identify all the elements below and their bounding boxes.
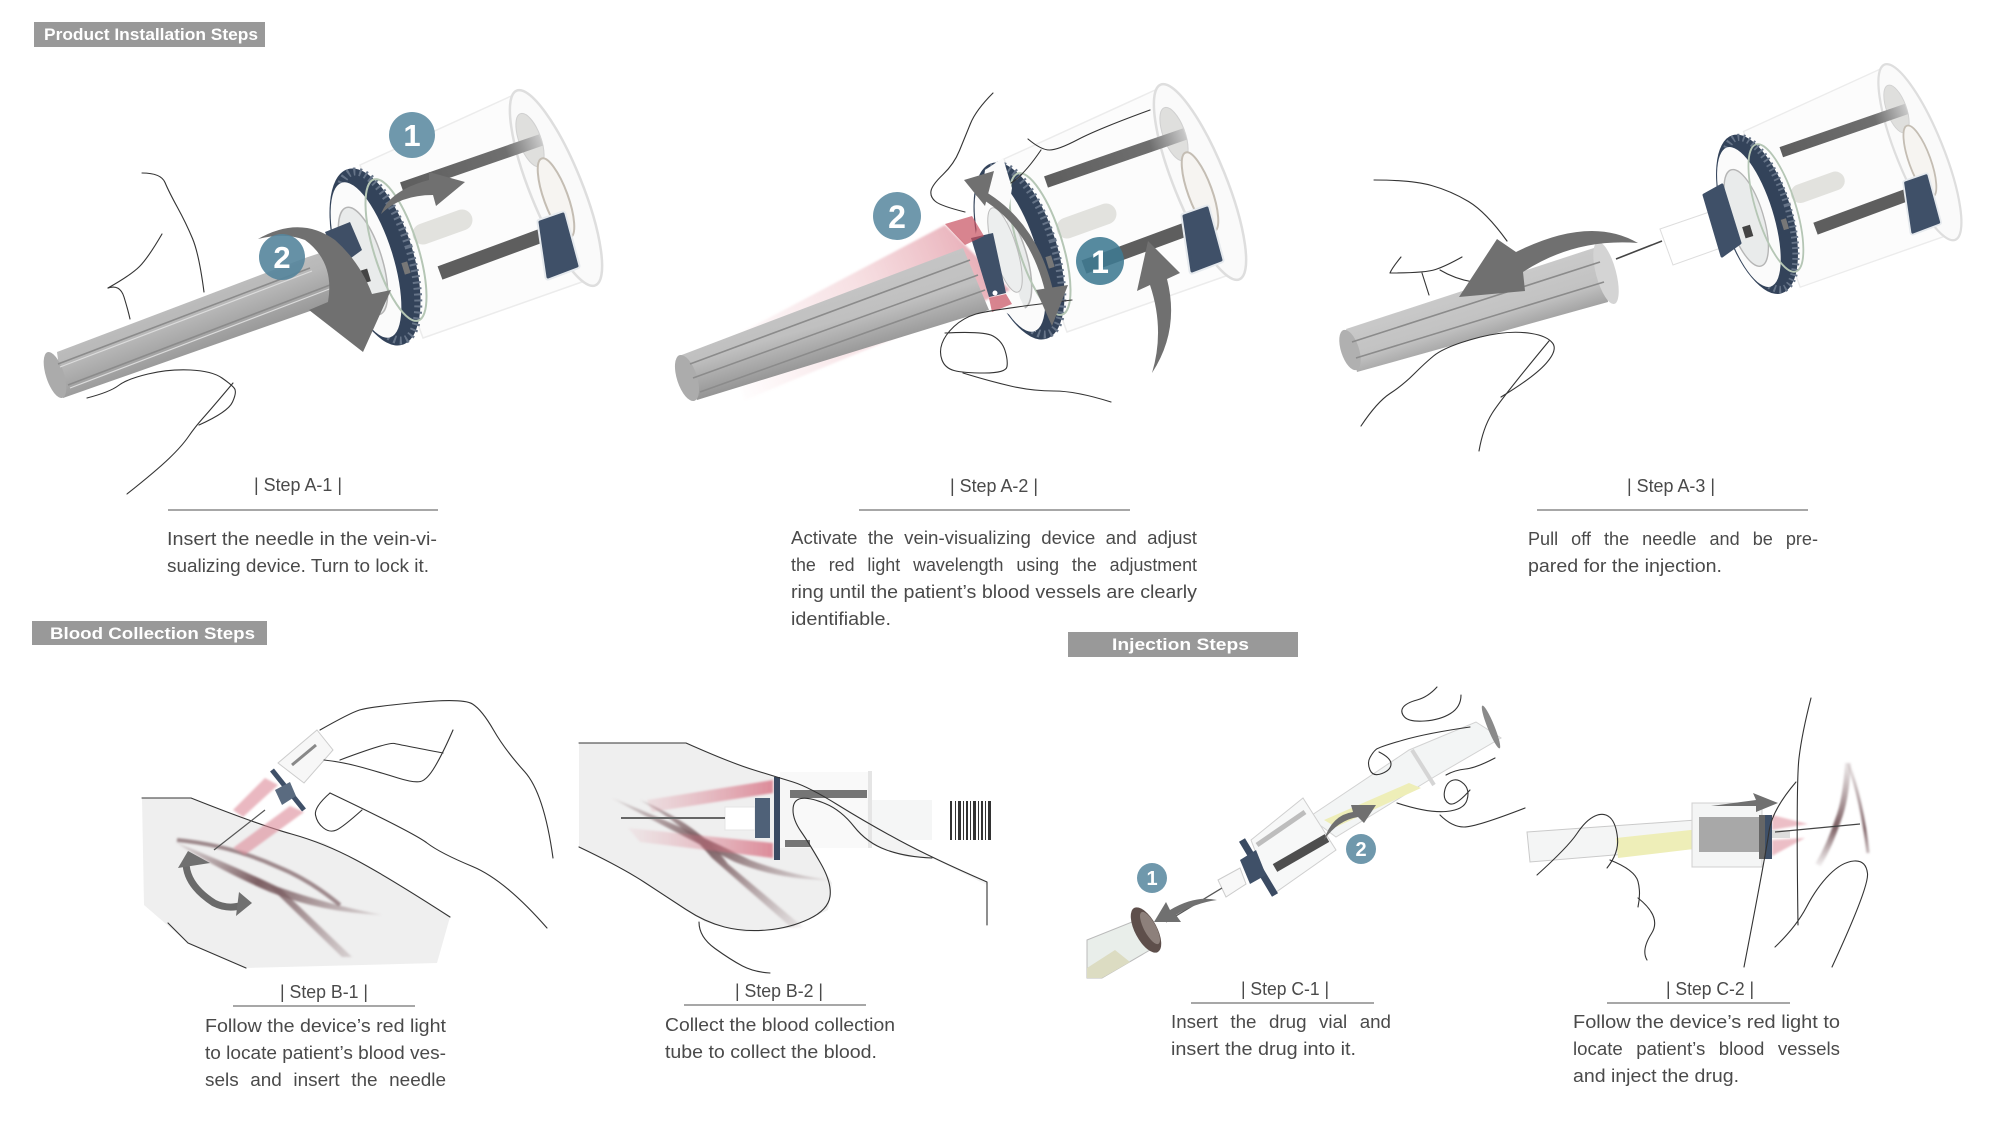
hand lower A-3 <box>1361 332 1554 451</box>
veins B-2 <box>612 798 830 928</box>
badge 2 A-1 <box>259 234 305 280</box>
caption: step B-2: Collect the blood collection <box>665 1015 895 1035</box>
caption: step A-3: Pull off the needle and be pre- <box>1528 529 1818 549</box>
red beams C-2 <box>1772 815 1808 856</box>
arm B-1 <box>142 798 450 968</box>
caption: step C-1: insert the drug into it. <box>1171 1039 1356 1059</box>
caption: step C-1: | Step C-1 | <box>1241 979 1329 999</box>
caption: step B-2: | Step B-2 | <box>735 981 823 1001</box>
syringe barrel C-2 <box>1527 820 1699 862</box>
red beams B-2 <box>628 780 773 858</box>
badge 2 C-1: 2 <box>1355 839 1367 861</box>
device A-1 <box>311 81 619 356</box>
barcode B-2 <box>950 801 991 840</box>
panel: step A-1 illustration <box>39 81 619 494</box>
red beams B-1 <box>233 778 304 855</box>
heading: Blood Collection Steps <box>32 621 267 645</box>
device B-1 <box>214 730 333 850</box>
arm B-2 <box>579 743 832 932</box>
panel: step B-1 illustration <box>142 701 553 968</box>
badge 2 A-2: 2 <box>888 199 906 235</box>
hand lower A-1 <box>87 370 235 494</box>
syringe barrel C-1 <box>1309 722 1501 837</box>
device A-2 <box>955 75 1263 350</box>
plunger flange C-1 <box>1479 704 1503 750</box>
arrow 2 A-1 <box>258 227 391 352</box>
caption: step C-1 <box>1171 979 1391 1059</box>
caption: step A-3: pared for the injection. <box>1528 556 1722 576</box>
caption: step B-2 <box>665 981 895 1062</box>
panel: step A-2 illustration <box>670 75 1263 404</box>
arrow 1 A-1 <box>381 172 465 214</box>
badge 2 C-1 <box>1346 834 1376 864</box>
arrow C-2 <box>1711 793 1778 812</box>
red light beam A-2 <box>727 225 1010 400</box>
heading: Product Installation Steps: Product Installation Steps <box>44 25 258 44</box>
caption: step A-1: Insert the needle in the vein-vi- <box>167 529 437 549</box>
hand outline A-1 <box>108 173 204 319</box>
device cup C-1 <box>1166 798 1336 922</box>
arrow B-1 <box>178 851 252 916</box>
arrow A-3 <box>1459 231 1638 297</box>
hand B-1 <box>315 701 553 928</box>
badge 1 A-2 <box>1076 237 1124 285</box>
vial C-1 <box>1087 903 1167 978</box>
arrow 1 C-1 <box>1154 899 1217 922</box>
badge 1 A-1 <box>389 112 435 158</box>
hand B-2 <box>579 743 987 973</box>
caption: step B-1 <box>205 982 446 1090</box>
wedge B-2 <box>809 787 987 885</box>
tube A-2 <box>670 216 1012 404</box>
badge 1 A-2: 1 <box>1091 244 1109 280</box>
badge 1 A-1: 1 <box>403 118 421 153</box>
caption: step C-1: Insert the drug vial and <box>1171 1012 1391 1032</box>
caption: step B-1: | Step B-1 | <box>280 982 368 1002</box>
caption: step B-1: sels and insert the needle <box>205 1070 446 1090</box>
hand cover over ring A-2 <box>975 158 1036 332</box>
caption: step C-2: Follow the device’s red light to <box>1573 1012 1840 1032</box>
caption: step A-2: Activate the vein-visualizing device and adjust <box>791 528 1197 548</box>
caption: step A-2 <box>791 476 1197 629</box>
badge 2 A-1: 2 <box>273 240 291 275</box>
arrow 2 C-1 <box>1324 805 1376 840</box>
drug C-2 <box>1616 829 1702 858</box>
badge 1 C-1 <box>1137 863 1167 893</box>
caption: step A-1 <box>167 475 438 576</box>
caption: step A-2: | Step A-2 | <box>950 476 1038 496</box>
panel: step B-2 illustration <box>579 743 991 973</box>
arrow 1 A-2 <box>1137 241 1180 373</box>
needle cover tube A-1 <box>39 222 362 401</box>
hand upper A-2 <box>931 93 1150 212</box>
heading: Blood Collection Steps: Blood Collection Steps <box>50 624 255 643</box>
circuit inner A-2 <box>981 204 1029 296</box>
badge 2 A-2 <box>873 192 921 240</box>
caption: step A-2: ring until the patient’s blood vessels are clearly <box>791 582 1197 602</box>
caption: step C-2: and inject the drug. <box>1573 1066 1739 1086</box>
heading: Injection Steps <box>1068 632 1298 657</box>
hand and body C-2 <box>1537 698 1868 967</box>
hub and collar A-3 <box>1616 185 1740 265</box>
hand C-1 <box>1368 687 1525 827</box>
panel: step C-1 illustration <box>1087 687 1525 978</box>
caption: step A-1: sualizing device. Turn to lock it. <box>167 556 429 576</box>
heading: Injection Steps: Injection Steps <box>1112 635 1249 654</box>
veins B-1 <box>175 840 382 957</box>
device C-2 <box>1692 803 1860 867</box>
device and tube B-2 <box>621 771 932 860</box>
caption: step A-1: | Step A-1 | <box>254 475 342 495</box>
needle cover A-3 <box>1335 240 1624 373</box>
heading: Product Installation Steps <box>34 22 265 47</box>
finger flange C-1 <box>1412 750 1434 785</box>
caption: step B-1: Follow the device’s red light <box>205 1016 446 1036</box>
veins C-2 <box>1818 763 1868 865</box>
arm edges B-1 <box>142 798 450 968</box>
caption: step A-2: identifiable. <box>791 609 891 629</box>
arrow: adjustment ring A-2 <box>964 171 1068 326</box>
badge 1 C-1: 1 <box>1146 868 1158 890</box>
caption: step A-3: | Step A-3 | <box>1627 476 1715 496</box>
hand upper A-3 <box>1374 180 1507 295</box>
caption: step A-3 <box>1528 476 1818 576</box>
caption: step B-2: tube to collect the blood. <box>665 1042 877 1062</box>
caption: step B-1: to locate patient’s blood ves- <box>205 1043 446 1063</box>
device A-3 <box>1700 56 1977 304</box>
caption: step A-2: the red light wavelength using the adjustment <box>791 555 1197 575</box>
drug C-1 <box>1324 783 1421 827</box>
caption: step C-2: | Step C-2 | <box>1666 979 1754 999</box>
hand lower A-2 <box>940 300 1111 402</box>
caption: step C-2 <box>1573 979 1840 1086</box>
panel: step C-2 illustration <box>1527 698 1868 967</box>
panel: step A-3 illustration <box>1335 56 1977 451</box>
caption: step C-2: locate patient’s blood vessels <box>1573 1039 1840 1059</box>
